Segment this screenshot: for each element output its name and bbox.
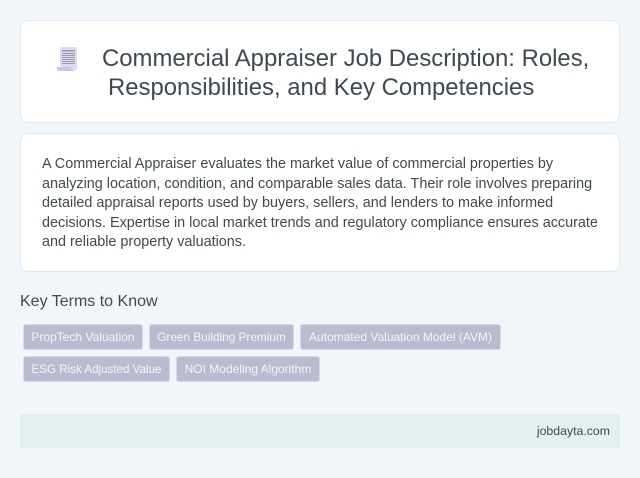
tag: PropTech Valuation (23, 324, 143, 350)
tag: Automated Valuation Model (300, 324, 501, 350)
heading: key terms: Key Terms to Know (20, 293, 158, 310)
tag: NOI Modeling Algorithm (176, 356, 320, 382)
tag: NOI Modeling Algorithm: NOI Modeling Algorithm (185, 362, 311, 376)
tag list (23, 324, 501, 382)
panel: description (20, 133, 620, 272)
tag: ESG Risk Adjusted Value (23, 356, 170, 382)
panel: title card (20, 20, 620, 123)
text: description paragraph: and reliable property valuations. (42, 234, 246, 250)
text: description paragraph: detailed appraisal reports used by buyers, sellers, and lenders to make informed (42, 195, 553, 211)
heading: title (102, 45, 589, 101)
footer bar (20, 414, 620, 448)
heading: title: Commercial Appraiser Job Description: Roles, (102, 45, 589, 72)
text: description paragraph (42, 156, 598, 250)
tag: Green Building Premium (149, 324, 294, 350)
text: footer site name: jobdayta.com (537, 424, 610, 438)
heading: title: Responsibilities, and Key Competencies (108, 74, 534, 101)
text: description paragraph: analyzing location, condition, and comparable sales data. Their role involves preparing (42, 176, 592, 192)
tag: ESG Risk Adjusted Value: ESG Risk Adjusted Value (32, 363, 161, 376)
tag: Automated Valuation Model: Automated Valuation Model (AVM) (309, 330, 492, 344)
text: description paragraph: decisions. Expertise in local market trends and regulatory compliance ensures accurate (42, 214, 598, 230)
text: description paragraph: A Commercial Appraiser evaluates the market value of commercial properties by (42, 156, 553, 172)
tag: Green Building Premium: Green Building Premium (157, 330, 286, 344)
icon: appraisal document (57, 47, 77, 71)
tag: PropTech Valuation: PropTech Valuation (31, 330, 135, 344)
